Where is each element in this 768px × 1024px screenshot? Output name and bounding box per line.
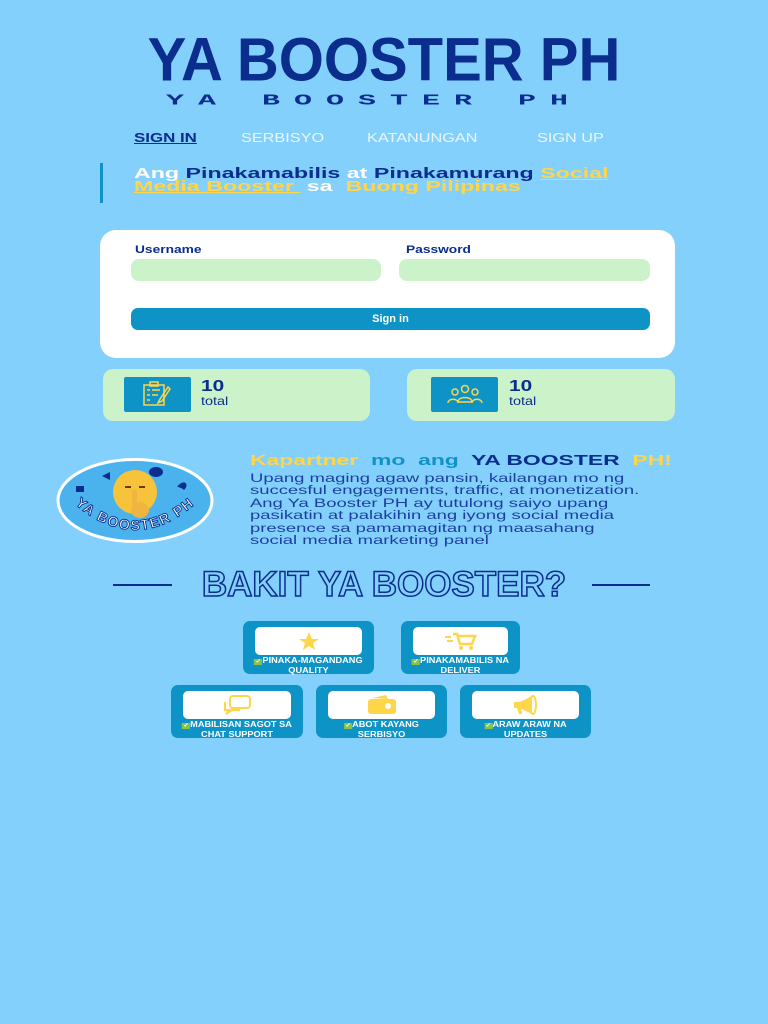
stat: orders: 10 xyxy=(201,378,224,395)
card: delivery: PINAKAMABILIS NA xyxy=(420,656,509,665)
card: affordable xyxy=(316,685,447,738)
partner body: pasikatin at palakihin ang iyong social media xyxy=(250,508,614,522)
nav: SIGN UP xyxy=(537,131,604,145)
card: updates: ✓ xyxy=(485,723,491,729)
stat: orders xyxy=(103,369,370,421)
username input xyxy=(131,259,381,281)
sign in button: Sign in xyxy=(372,313,409,325)
section heading: BAKIT YA BOOSTER? xyxy=(202,565,566,604)
partner heading: Kapartner mo ang YA BOOSTER PH! xyxy=(250,453,672,469)
card: chat support: MABILISAN SAGOT SA xyxy=(190,720,292,729)
nav xyxy=(134,131,604,145)
card: updates: UPDATES xyxy=(504,730,547,739)
partner body: succesful engagements, traffic, at monetization. xyxy=(250,483,639,497)
card: delivery xyxy=(401,621,520,674)
subtitle: YA BOOSTER PH xyxy=(166,92,582,110)
password label: Password xyxy=(406,244,471,256)
card: affordable: ✓ xyxy=(345,723,351,729)
username label: Username xyxy=(135,244,202,256)
card: delivery: ✓ xyxy=(413,659,419,665)
card: quality xyxy=(243,621,374,674)
login panel xyxy=(100,230,675,358)
card: updates: ARAW ARAW NA xyxy=(492,720,567,729)
card: affordable: SERBISYO xyxy=(358,730,405,739)
card: quality: PINAKA-MAGANDANG xyxy=(262,656,363,665)
stat: orders: total xyxy=(201,394,228,408)
sign in button xyxy=(131,308,650,330)
title: YA BOOSTER PH xyxy=(148,26,620,94)
nav: SERBISYO xyxy=(241,131,324,145)
partner body: Ang Ya Booster PH ay tutulong saiyo upang xyxy=(250,496,608,510)
card: chat support xyxy=(171,685,303,738)
icon: clipboard xyxy=(124,377,191,412)
nav: KATANUNGAN xyxy=(367,131,477,145)
partner body: Upang maging agaw pansin, kailangan mo ng xyxy=(250,471,624,485)
icon: people xyxy=(431,377,498,412)
nav: SIGN IN xyxy=(134,131,197,145)
stat: users xyxy=(407,369,675,421)
partner body: social media marketing panel xyxy=(250,533,489,547)
tagline xyxy=(100,163,630,203)
tagline: Ang Pinakamabilis at Pinakamurang Social xyxy=(134,166,609,182)
stat: users: total xyxy=(509,394,536,408)
card: updates xyxy=(460,685,591,738)
stat: users: 10 xyxy=(509,378,532,395)
logo badge xyxy=(56,458,214,543)
tagline: Media Booster sa Buong Pilipinas xyxy=(134,179,521,195)
card: chat support: ✓ xyxy=(183,723,189,729)
partner body: presence sa pamamagitan ng maasahang xyxy=(250,521,595,535)
card: chat support: CHAT SUPPORT xyxy=(201,730,273,739)
card: quality: ✓ xyxy=(256,659,261,665)
card: delivery: DELIVER xyxy=(441,666,480,675)
partner body xyxy=(250,471,639,547)
card: affordable: ABOT KAYANG xyxy=(352,720,419,729)
card: quality: QUALITY xyxy=(288,666,329,675)
logo badge: YA BOOSTER PH xyxy=(77,496,194,531)
password input xyxy=(399,259,650,281)
